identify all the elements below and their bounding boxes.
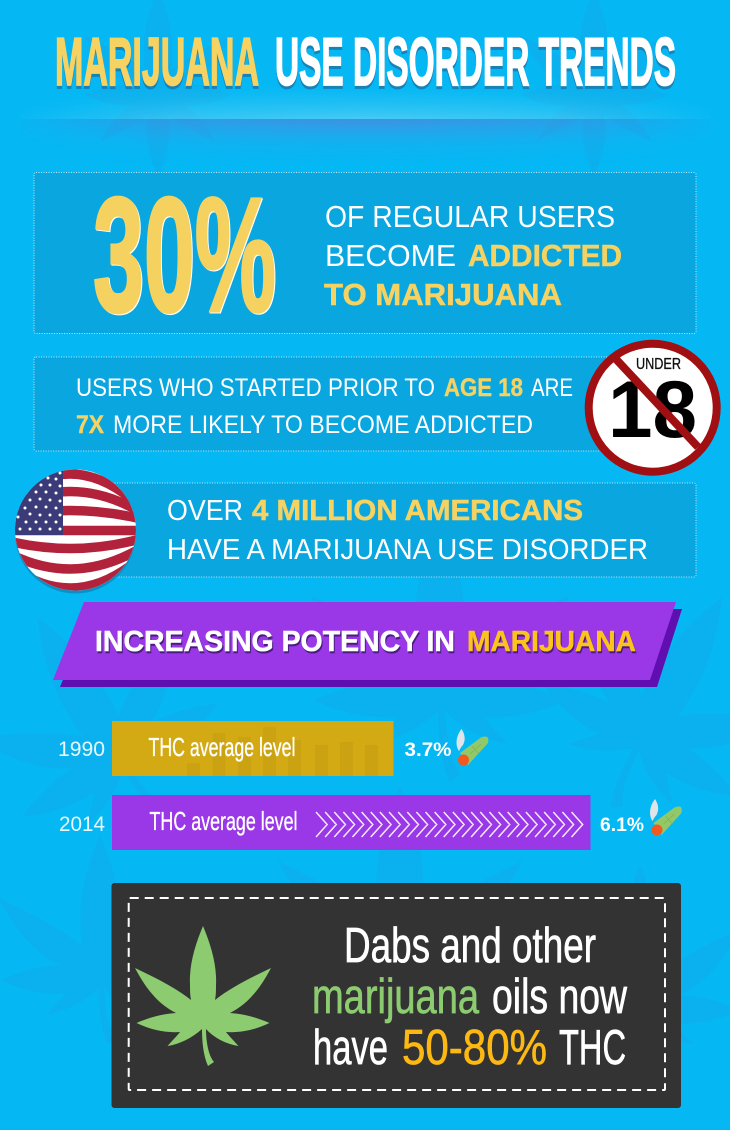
icon: joint 1990 xyxy=(457,729,488,766)
panel: 4 million Americans xyxy=(60,483,696,577)
stat: 30%: 30% xyxy=(93,163,276,346)
statement text xyxy=(324,199,622,312)
statement text: OF REGULAR USERS xyxy=(325,199,615,234)
callout text: have xyxy=(313,1021,388,1075)
bar chart: THC level 2014 xyxy=(59,795,682,850)
americans statement text: OVER xyxy=(167,495,243,527)
bar chart: THC level 1990: 3.7% xyxy=(404,740,452,761)
under 18 statement text: USERS WHO STARTED PRIOR TO xyxy=(76,374,435,402)
americans statement text xyxy=(167,495,648,566)
title: MARIJUANA xyxy=(55,24,259,100)
americans statement text: 4 MILLION AMERICANS xyxy=(252,495,583,527)
callout text: 50-80% xyxy=(402,1021,547,1075)
under 18 statement text: 7X xyxy=(76,411,104,439)
icon: under 18 prohibition sign: UNDER xyxy=(636,356,681,373)
statement text: BECOME xyxy=(325,238,456,273)
panel: 30 percent of regular users xyxy=(34,163,696,346)
under 18 statement text: AGE 18 xyxy=(444,374,523,402)
panel: users under 18 xyxy=(34,357,654,451)
callout text: oils now xyxy=(492,970,627,1024)
chevron pattern xyxy=(316,812,583,837)
icon: american flag globe xyxy=(15,470,136,594)
americans statement text: HAVE A MARIJUANA USE DISORDER xyxy=(167,534,648,566)
bar chart: THC level 2014: 6.1% xyxy=(600,815,644,836)
under 18 statement text: ARE xyxy=(531,374,573,402)
callout text: marijuana xyxy=(312,970,480,1024)
icon: cannabis leaf xyxy=(135,926,271,1066)
callout text: Dabs and other xyxy=(344,919,596,973)
bar chart: THC level 2014: THC average level xyxy=(150,806,298,836)
callout text xyxy=(312,919,627,1075)
banner heading: MARIJUANA xyxy=(467,626,636,658)
bar chart: THC level 2014: 2014 xyxy=(59,813,105,836)
bar chart: THC level 1990: THC average level xyxy=(148,732,296,762)
icon: under 18 prohibition sign: 18 xyxy=(608,365,697,455)
banner: increasing potency xyxy=(53,602,682,687)
banner heading: INCREASING POTENCY IN xyxy=(95,626,455,658)
title xyxy=(55,24,676,100)
callout text: THC xyxy=(559,1021,626,1075)
banner heading xyxy=(95,626,636,658)
bar chart: THC level 1990: 1990 xyxy=(58,738,105,761)
under 18 statement text xyxy=(76,374,573,439)
title shadow glow xyxy=(36,92,694,148)
icon: joint 2014 xyxy=(650,799,682,836)
under 18 statement text: MORE LIKELY TO BECOME ADDICTED xyxy=(113,411,533,439)
callout: dabs and oils xyxy=(112,883,681,1108)
statement text: ADDICTED xyxy=(468,238,622,273)
icon: under 18 prohibition sign xyxy=(589,344,717,472)
statement text: TO MARIJUANA xyxy=(324,277,562,312)
bar chart: THC level 1990 xyxy=(58,721,488,776)
